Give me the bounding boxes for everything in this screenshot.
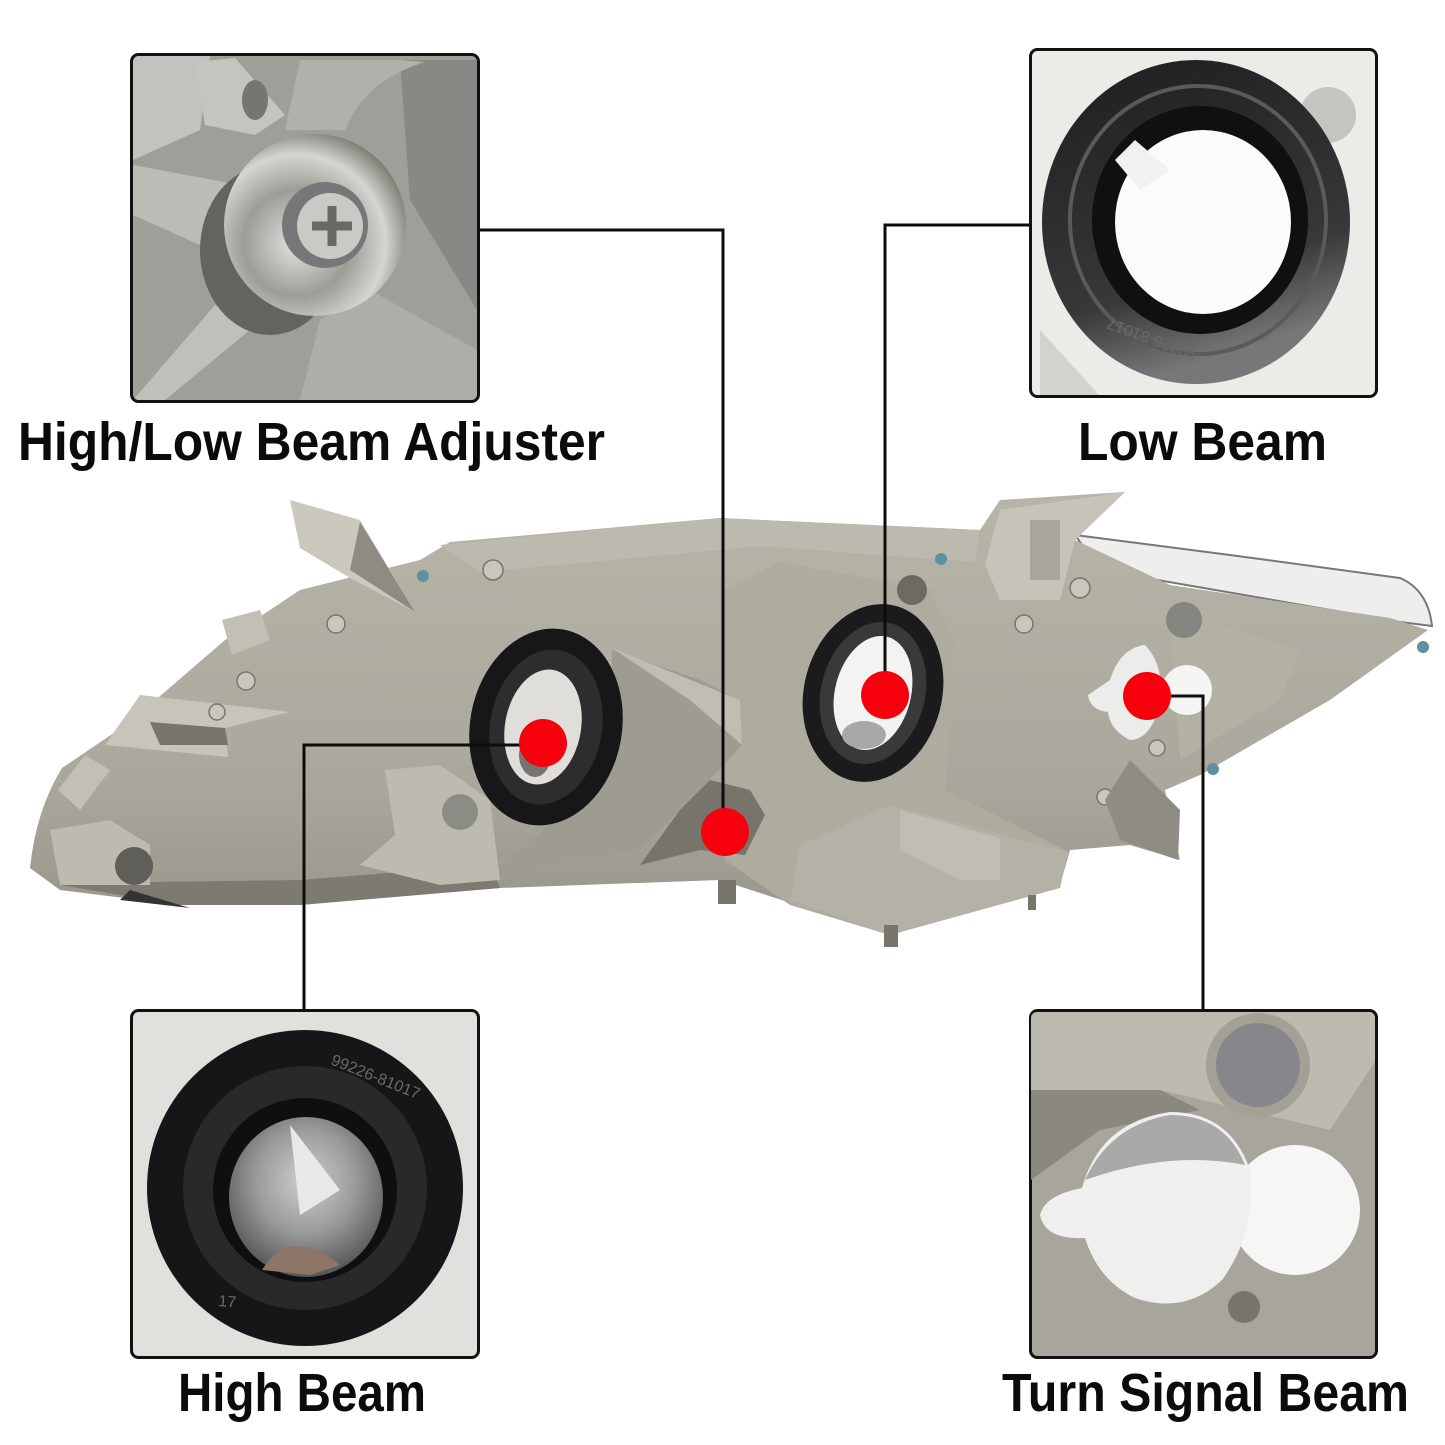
pegs	[209, 560, 1165, 805]
housing body	[30, 492, 1428, 935]
turn signal caps	[1088, 645, 1212, 740]
heading: low beam: Low Beam	[1078, 412, 1327, 472]
panel: turn signal beam	[1030, 1010, 1376, 1358]
high beam bulb ring	[454, 616, 638, 838]
flange between the two sockets	[500, 650, 742, 870]
right clip	[985, 492, 1125, 600]
red marker dots	[519, 671, 1171, 856]
moulded number 17: 17	[218, 1293, 237, 1312]
connector lines	[304, 225, 1203, 1010]
panel: high beam	[132, 1010, 478, 1358]
clear lens edge	[1075, 535, 1432, 626]
heading: turn signal beam: Turn Signal Beam	[1002, 1363, 1409, 1423]
central projector block	[725, 562, 1065, 935]
low beam bulb ring	[784, 589, 962, 797]
upper rim band	[440, 518, 980, 572]
left clips	[290, 500, 415, 612]
right housing shading	[1170, 610, 1300, 760]
adjuster base	[640, 780, 765, 865]
heading: high beam: High Beam	[178, 1363, 426, 1423]
blue screws	[417, 553, 1429, 775]
left side shading	[60, 865, 500, 905]
moulded part number: 99226-81017	[329, 1052, 422, 1103]
moulded part number: 99226-81017	[1105, 314, 1199, 362]
heading: high/low beam adjuster: High/Low Beam Adjuster	[18, 412, 605, 472]
panel: low beam	[1030, 50, 1376, 396]
headlight assembly	[30, 492, 1432, 947]
panel: high/low beam adjuster	[132, 54, 478, 402]
lower foot	[790, 805, 1068, 935]
